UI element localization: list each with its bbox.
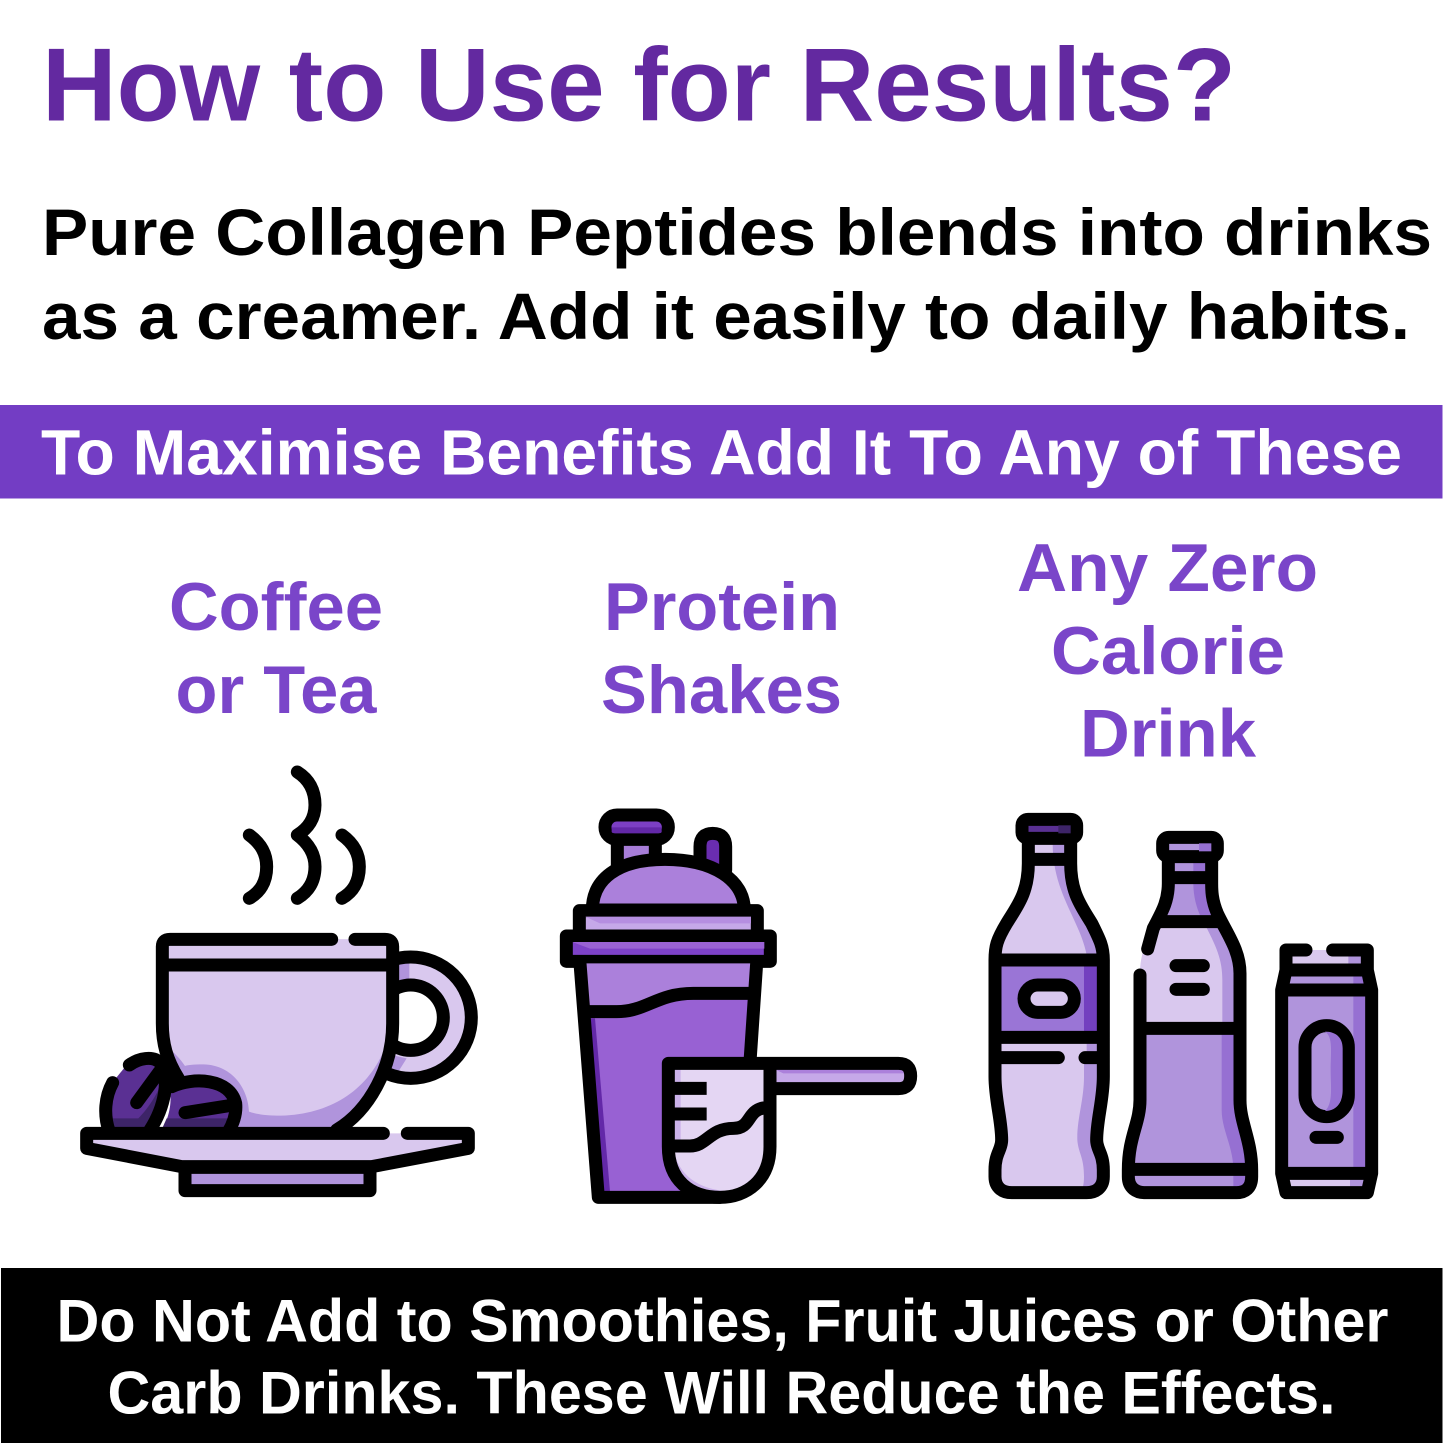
label: protein shakes: Shakes	[601, 652, 842, 728]
warning banner	[1, 1268, 1442, 1443]
scoop	[668, 1063, 911, 1197]
label: any zero calorie drink	[1017, 530, 1318, 772]
tall bottle	[993, 819, 1107, 1195]
middle bottle	[1127, 837, 1253, 1195]
title: How to Use for Results?	[42, 28, 1236, 144]
steam	[249, 772, 359, 898]
warning banner: Carb Drinks. These Will Reduce the Effects.	[108, 1360, 1336, 1426]
icon: coffee cup with beans	[87, 772, 471, 1191]
label: any zero calorie drink: Drink	[1080, 696, 1256, 772]
cup body	[162, 939, 393, 1133]
banner: maximise benefits: To Maximise Benefits Add It To Any of These	[41, 416, 1402, 488]
cup handle	[350, 957, 471, 1078]
warning banner: Do Not Add to Smoothies, Fruit Juices or Other	[56, 1288, 1388, 1354]
shaker dome lid	[566, 859, 770, 961]
label: coffee or tea	[169, 569, 383, 728]
label: any zero calorie drink: Calorie	[1051, 613, 1285, 689]
shaker cap and spout	[605, 815, 726, 870]
coffee beans	[106, 1058, 236, 1133]
label: protein shakes	[601, 569, 842, 728]
label: protein shakes: Protein	[604, 569, 840, 645]
intro text: as a creamer. Add it easily to daily habits.	[42, 279, 1410, 353]
saucer	[87, 1133, 468, 1191]
intro text	[42, 195, 1432, 353]
can	[1280, 947, 1373, 1193]
icon: protein shaker and scoop	[566, 815, 911, 1197]
shaker cup	[580, 963, 757, 1197]
label: coffee or tea: or Tea	[176, 652, 378, 728]
icon: bottles and can	[993, 819, 1373, 1195]
intro text: Pure Collagen Peptides blends into drinks	[42, 195, 1432, 269]
label: coffee or tea: Coffee	[169, 569, 383, 645]
label: any zero calorie drink: Any Zero	[1017, 530, 1318, 606]
